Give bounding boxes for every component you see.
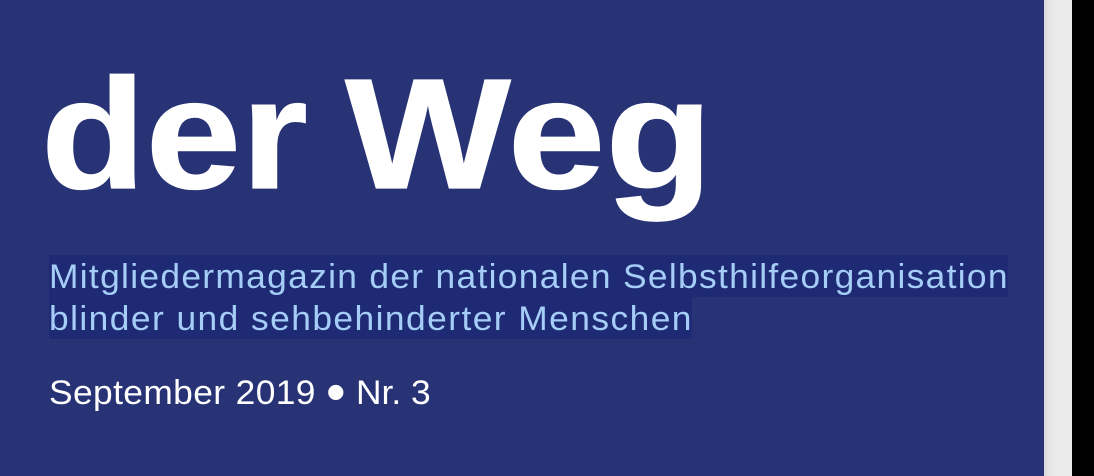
subtitle: highlighted two-line text block: Mitgliedermagazin der nationalen Selbsthilfeorganisation [49,258,1009,296]
issue date: September 2019 [49,374,316,412]
title: der [41,47,308,222]
issue date: Nr. 3 [356,374,431,412]
subtitle: highlighted two-line text block: blinder und sehbehinderter Menschen [49,300,693,338]
issue date: • [326,360,346,423]
page edge: light grey strip [1044,0,1072,476]
issue date [49,360,431,423]
title [41,47,713,222]
title: Weg [345,47,713,222]
subtitle: highlighted two-line text block [49,255,1009,339]
